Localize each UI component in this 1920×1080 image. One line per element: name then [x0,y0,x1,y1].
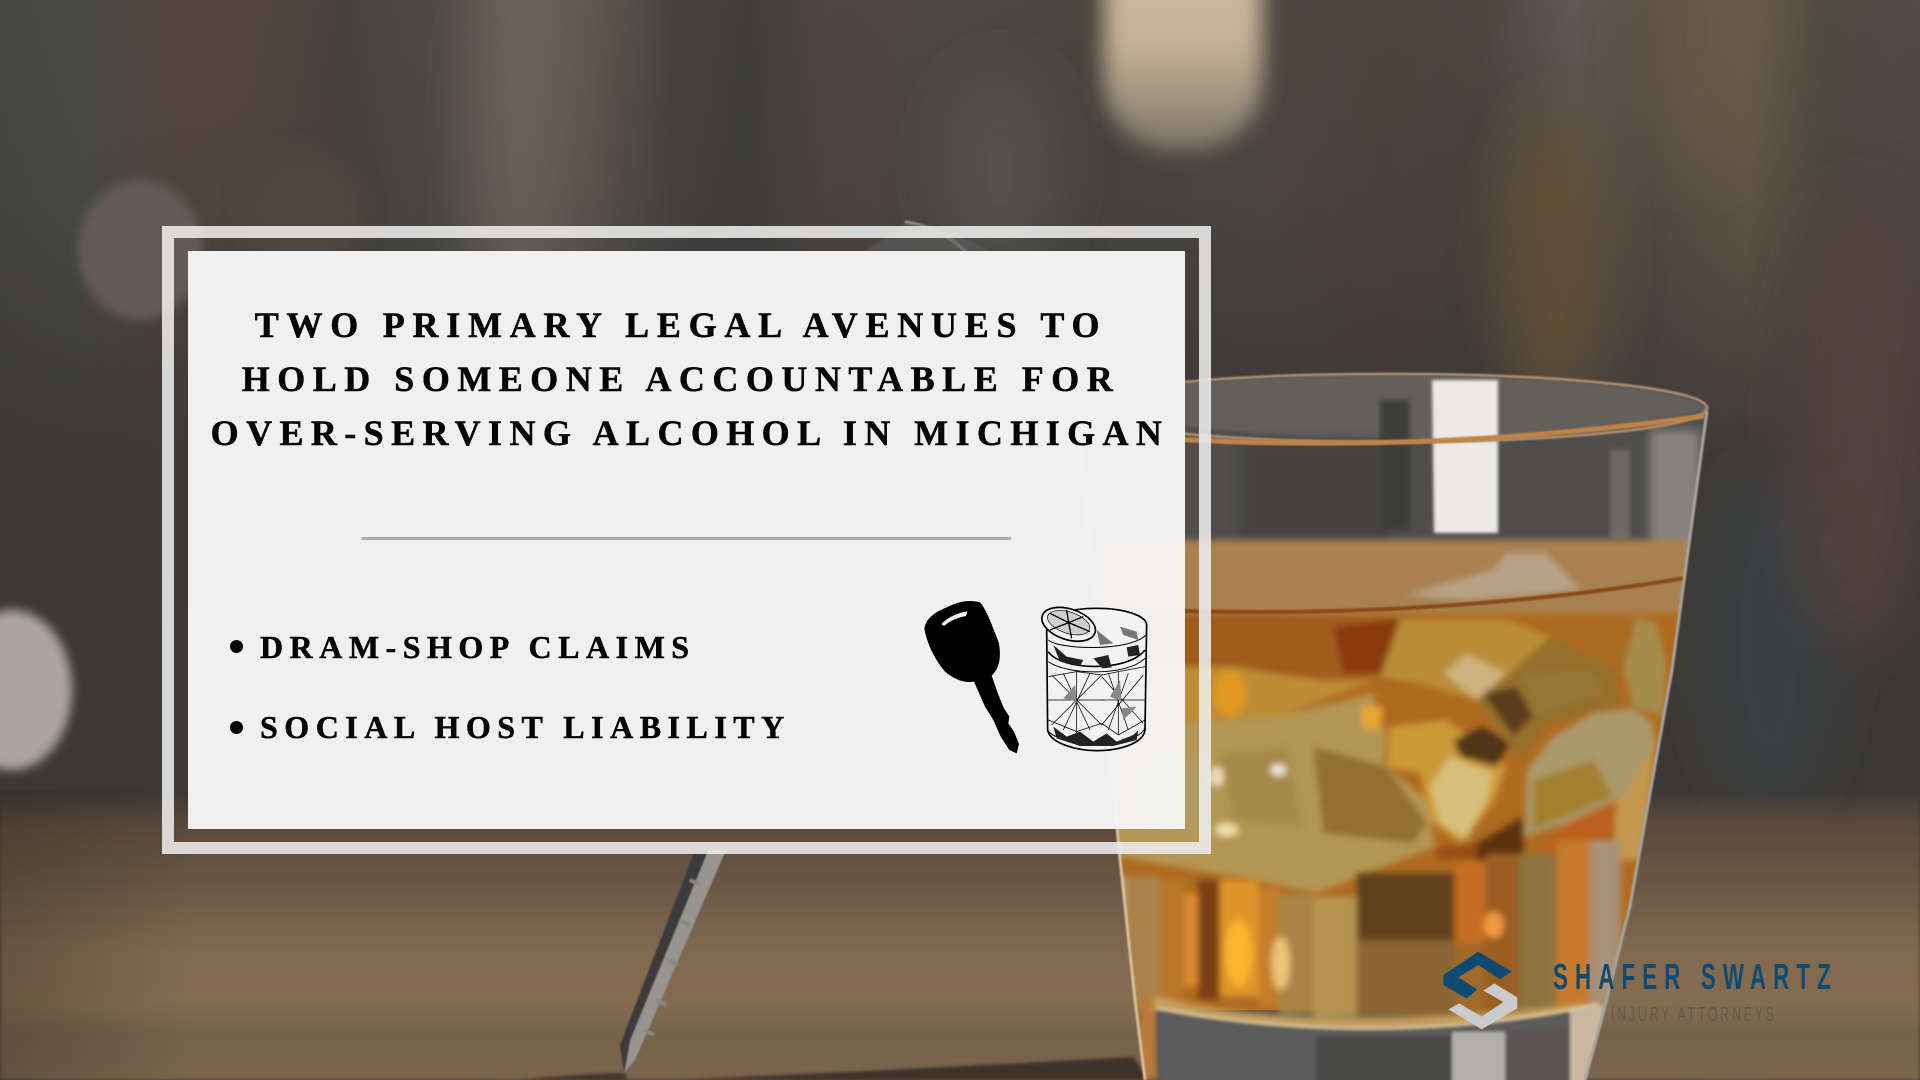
white highlight reflected on glass [1432,380,1498,533]
ice cubes and liquid reflections (upper) [1087,540,1700,893]
icon: car key [924,601,1019,753]
logo: Shafer Swartz Injury Attorneys [1443,952,1831,1029]
heading: TWO PRIMARY LEGAL AVENUES TO [255,305,1107,345]
bullet: social host liability: SOCIAL HOST LIABILITY [260,709,791,745]
logo wordmark: SHAFER SWARTZ [1553,958,1831,997]
bullet: dram-shop claims: DRAM-SHOP CLAIMS [260,629,696,665]
panel: white text card [188,251,1185,829]
icon: cut-crystal whisky glass with lemon slice [1038,601,1147,751]
whisky glass [1114,372,1710,1080]
heading [211,305,1169,453]
car key behind the panel [620,222,1020,1073]
liquid [1120,609,1679,1010]
glass rim and edges [1073,374,1707,442]
lower liquid facets [1117,840,1621,1080]
glass base [1157,1004,1604,1080]
logo mark [1443,952,1517,1029]
wooden bar top [0,790,1920,1080]
outer translucent frame [162,226,1211,854]
bokeh lights [0,0,1262,770]
heading: OVER-SERVING ALCOHOL IN MICHIGAN [211,413,1169,453]
divider line [362,537,1011,540]
heading: HOLD SOMEONE ACCOUNTABLE FOR [242,359,1120,399]
logo tagline: INJURY ATTORNEYS [1611,1003,1774,1026]
